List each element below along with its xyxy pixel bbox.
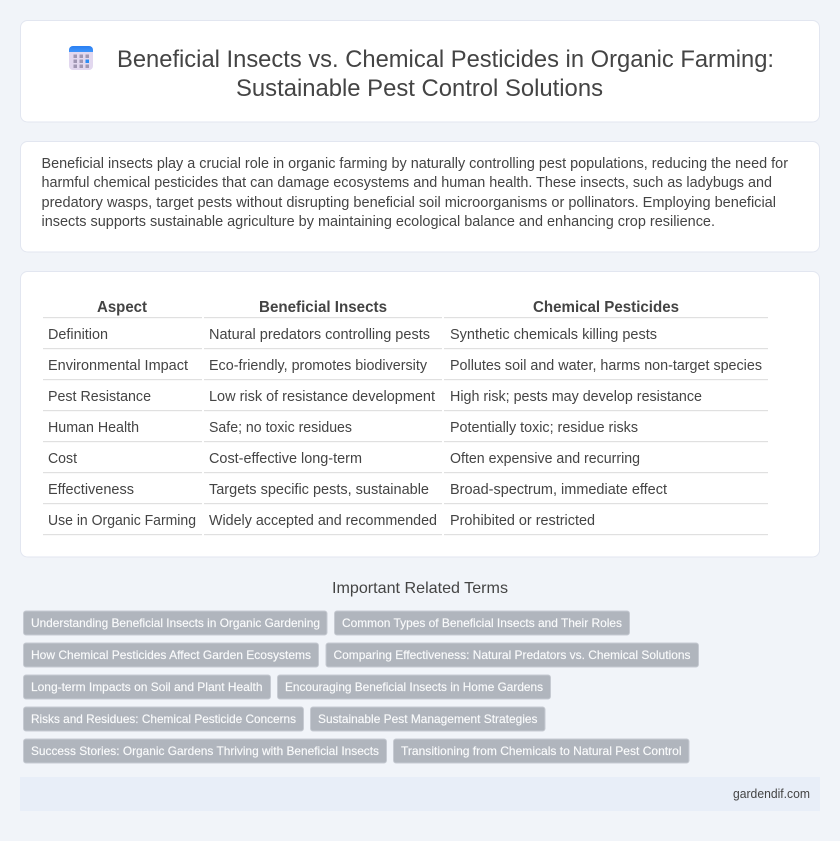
tag: Sustainable Pest Management Strategies [318,712,538,726]
table row: use in organic farming: Prohibited or restricted [450,513,595,529]
table row: use in organic farming: Use in Organic Farming [48,513,196,529]
table row: environmental impact: Eco-friendly, promotes biodiversity [209,358,428,374]
text block: introduction: predatory wasps, target pests without disrupting beneficial soil microorganisms or pollinators. Employing beneficial [42,195,776,211]
tag: Common Types of Beneficial Insects and Their Roles [342,616,622,630]
table row: environmental impact: Pollutes soil and water, harms non-target species [450,358,762,374]
text block: introduction: insects supports sustainable agriculture by maintaining ecological balance and enhancing crop resilience. [42,214,715,230]
table row: environmental impact [48,358,762,374]
table header row: Aspect [97,299,148,316]
tag: Transitioning from Chemicals to Natural Pest Control [401,744,682,758]
tag: How Chemical Pesticides Affect Garden Ecosystems [31,648,311,662]
table row: pest resistance: Pest Resistance [48,389,151,405]
table row: use in organic farming [48,513,595,529]
tag [24,675,270,699]
panel: comparison table [20,272,820,557]
tag: Risks and Residues: Chemical Pesticide Concerns [31,712,296,726]
table row: use in organic farming: Widely accepted and recommended [209,513,437,529]
table row: cost: Cost-effective long-term [209,451,362,467]
title: Beneficial Insects vs. Chemical Pesticides in Organic Farming: [117,46,774,73]
heading: important related terms: Important Related Terms [332,580,508,597]
table row: effectiveness: Targets specific pests, sustainable [209,482,429,498]
panel: related term tags [24,611,698,763]
text block: introduction: Beneficial insects play a crucial role in organic farming by naturally controlling pest populations, reducing the need for [42,156,788,172]
table row: cost: Cost [48,451,77,467]
tag [326,643,698,667]
tag [310,707,545,731]
table row: definition: Synthetic chemicals killing pests [450,327,657,343]
tag: Long-term Impacts on Soil and Plant Health [31,680,262,694]
tag: Encouraging Beneficial Insects in Home Gardens [285,680,543,694]
tag: Understanding Beneficial Insects in Organic Gardening [31,616,320,630]
table row: pest resistance [48,389,702,405]
tag [24,739,386,763]
table header row: Beneficial Insects [259,299,387,316]
table row: definition: Definition [48,327,108,343]
footer source text: gardendif.com [733,786,810,801]
table row: effectiveness: Broad-spectrum, immediate effect [450,482,667,498]
title [117,46,774,102]
table row: human health: Potentially toxic; residue risks [450,420,638,436]
table row: definition [48,327,657,343]
text block: introduction [42,156,788,230]
table row: pest resistance: Low risk of resistance development [209,389,435,405]
tag: Comparing Effectiveness: Natural Predators vs. Chemical Solutions [334,648,690,662]
table row: pest resistance: High risk; pests may develop resistance [450,389,702,405]
table row: environmental impact: Environmental Impact [48,358,188,374]
table row: cost [48,451,640,467]
tag: Success Stories: Organic Gardens Thriving with Beneficial Insects [31,744,379,758]
table row: human health [48,420,638,436]
panel: introduction paragraph [20,142,820,252]
table header row: Chemical Pesticides [533,299,679,316]
panel: header [20,20,820,122]
tag [394,739,689,763]
table row: effectiveness [48,482,667,498]
text block: introduction: harmful chemical pesticides that can damage ecosystems and human health. These insects, such as ladybugs and [42,175,772,191]
table row: human health: Safe; no toxic residues [209,420,352,436]
tag [24,611,327,635]
footer [20,777,820,811]
table row: effectiveness: Effectiveness [48,482,134,498]
tag [278,675,550,699]
title: Sustainable Pest Control Solutions [236,75,603,102]
table header row [97,299,679,316]
table row: definition: Natural predators controlling pests [209,327,430,343]
table row: human health: Human Health [48,420,139,436]
icon: calendar [69,46,93,70]
table row: cost: Often expensive and recurring [450,451,640,467]
tag [334,611,630,635]
tag [24,643,318,667]
tag [24,707,304,731]
